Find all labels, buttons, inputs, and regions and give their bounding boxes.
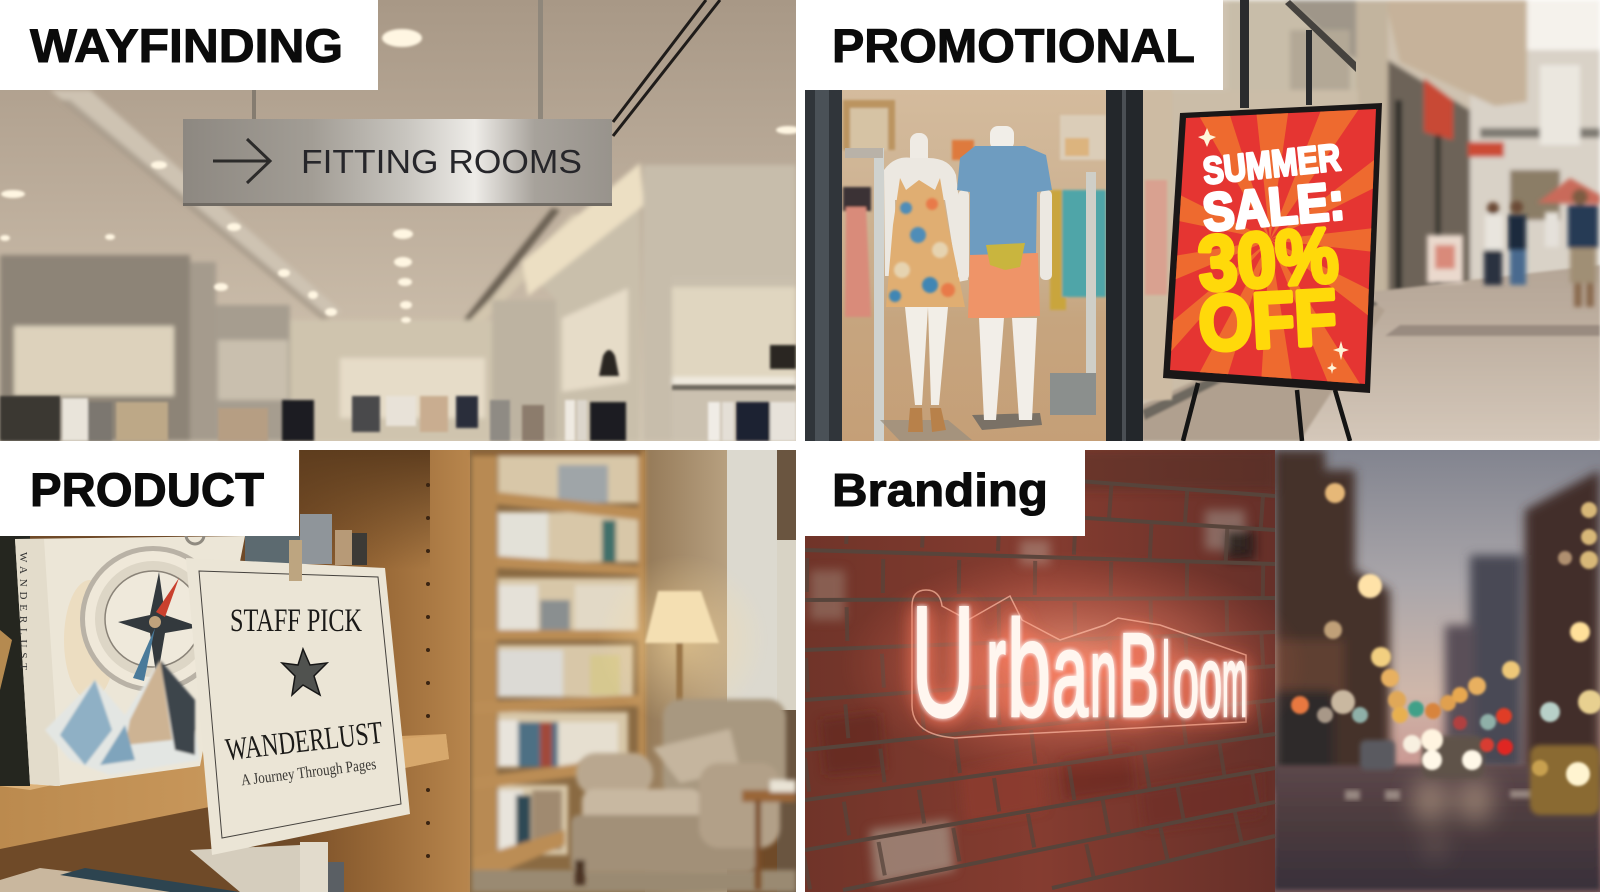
bokeh lights xyxy=(1291,483,1600,786)
ceiling and store interior xyxy=(0,0,796,441)
neon sign: urbanbloom: o xyxy=(1199,626,1222,738)
neon tube outline xyxy=(912,590,1246,738)
armchair xyxy=(571,699,796,890)
neon sign: urbanbloom xyxy=(911,574,1247,750)
label: branding: Branding xyxy=(832,464,1048,516)
poster sunburst xyxy=(1171,110,1374,384)
brick wall xyxy=(805,450,1310,892)
panel: promotional xyxy=(800,0,1600,441)
weathered brick patches xyxy=(805,450,1275,885)
label: wayfinding xyxy=(0,0,378,90)
neon sign: urbanbloom: o xyxy=(1173,624,1199,738)
poster text: SUMMER xyxy=(1201,137,1343,193)
hanging sign: fitting rooms xyxy=(183,0,612,206)
crosswalk xyxy=(1345,790,1535,800)
icon: arrow xyxy=(213,139,270,183)
neon sign: urbanbloom: B xyxy=(1119,609,1159,742)
shelf talker card: staff pick xyxy=(186,540,410,855)
label: branding xyxy=(800,446,1085,536)
label: product: PRODUCT xyxy=(30,463,264,516)
neon sign: urbanbloom: U xyxy=(911,574,975,750)
dark book spine xyxy=(0,536,30,786)
icon: compass xyxy=(80,536,206,691)
book: wanderlust cover xyxy=(15,526,245,786)
mannequin with blue shirt and shorts xyxy=(957,126,1052,430)
icon: sparkles xyxy=(1198,128,1349,374)
icon: star xyxy=(282,649,327,695)
books above shelf xyxy=(245,514,367,566)
book spine title: WANDERLUST xyxy=(17,552,29,672)
shop interior xyxy=(805,90,1172,441)
back wall, window and side panel xyxy=(0,450,796,892)
street background xyxy=(1274,450,1600,892)
vertical mortar joints xyxy=(805,480,1275,873)
road reflections xyxy=(1412,778,1493,859)
label: wayfinding: WAYFINDING xyxy=(30,19,343,72)
label: product xyxy=(0,446,299,536)
mortar courses xyxy=(805,460,1275,890)
neon sign: urbanbloom: l xyxy=(1162,622,1170,739)
neon sign: urbanbloom: b xyxy=(1007,593,1051,746)
poster: summer sale xyxy=(1163,103,1382,393)
door frames xyxy=(805,90,1143,441)
clothing racks xyxy=(0,345,796,441)
neon sign: urbanbloom: r xyxy=(986,592,1006,746)
sign text: FITTING ROOMS xyxy=(301,143,582,180)
background bookcase xyxy=(472,450,796,892)
poster text: OFF xyxy=(1196,273,1339,368)
clip xyxy=(289,540,302,581)
floor lamp xyxy=(610,570,740,708)
easel legs xyxy=(1183,383,1350,441)
card headline: STAFF PICK xyxy=(230,603,362,639)
neon sign: urbanbloom: a xyxy=(1052,606,1088,742)
label: promotional xyxy=(800,0,1223,90)
shelf holes xyxy=(426,483,430,858)
label: promotional: PROMOTIONAL xyxy=(832,19,1195,72)
card subtitle: A Journey Through Pages xyxy=(240,756,377,789)
poster text: 30% xyxy=(1195,210,1341,308)
pavement xyxy=(1142,265,1600,441)
poster text: SALE: xyxy=(1200,172,1347,243)
shelf board xyxy=(0,734,449,849)
ceiling vents xyxy=(613,0,720,136)
people on the walkway xyxy=(1427,178,1600,307)
security gates xyxy=(845,148,1096,441)
recessed ceiling lights xyxy=(0,29,800,323)
panel: branding: m xyxy=(1222,626,1247,738)
cars xyxy=(1360,736,1600,815)
card title: WANDERLUST xyxy=(223,714,385,767)
mannequin with floral dress xyxy=(880,133,972,441)
mountains xyxy=(45,660,200,775)
panel: branding xyxy=(800,446,1600,892)
store window frames xyxy=(1240,0,1356,108)
poster text xyxy=(1198,144,1343,352)
panel: product xyxy=(0,446,796,892)
books below shelf xyxy=(0,842,344,892)
mall background xyxy=(1143,0,1600,441)
clothing racks in window xyxy=(843,187,1106,317)
neon sign: urbanbloom: n xyxy=(1090,613,1117,741)
panel: wayfinding xyxy=(0,0,800,441)
